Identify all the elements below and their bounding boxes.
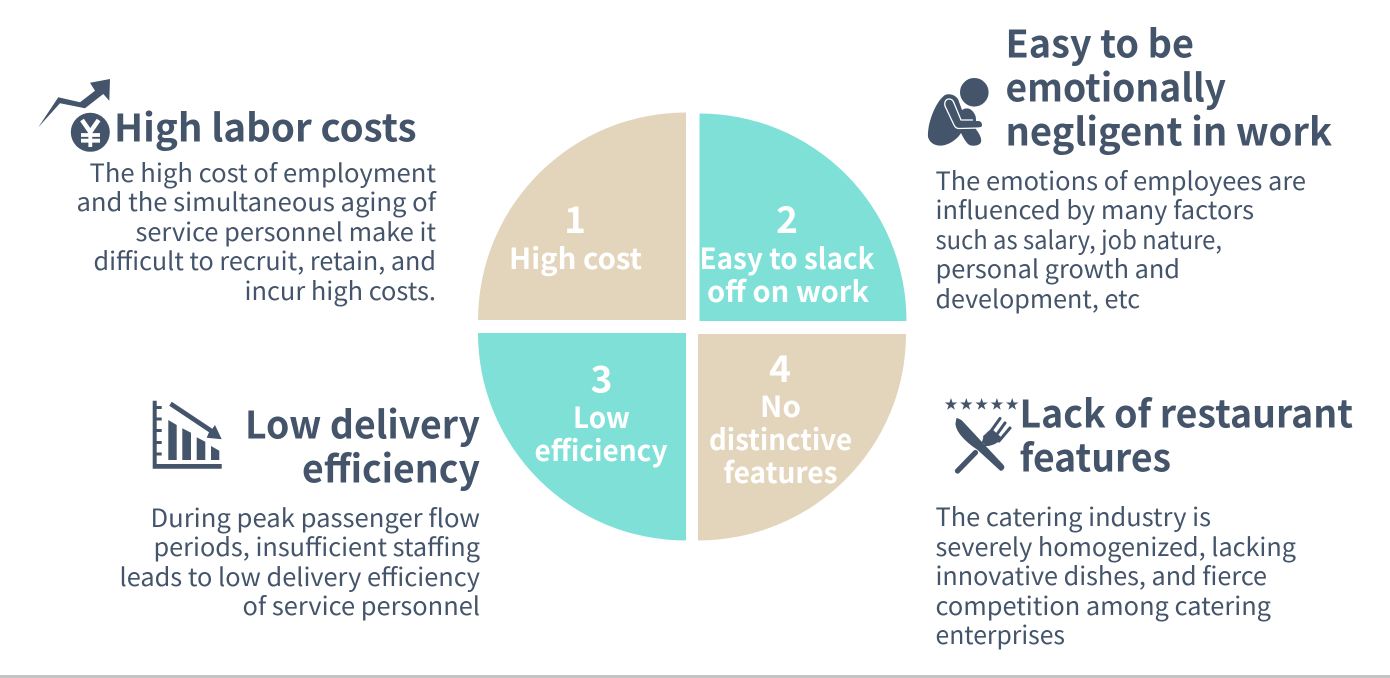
quadrant 3: Low efficiency <box>478 333 686 540</box>
heading: Easy to be emotionally negligent in work: negligent in work <box>1006 102 1332 156</box>
text block: emotions description <box>936 162 1306 316</box>
quadrant 1: High cost <box>478 112 686 320</box>
text block: emotions description: personal growth and <box>936 250 1180 286</box>
text block: emotions description: development, etc <box>936 280 1140 316</box>
heading: Low delivery efficiency <box>245 394 480 494</box>
text block: delivery description: of service personnel <box>242 587 480 623</box>
quadrant 3: Low efficiency: Low <box>573 395 630 437</box>
text block: high labor costs description: and the simultaneous aging of <box>76 183 437 219</box>
icon: declining bar chart <box>153 401 222 469</box>
text block: catering description <box>936 498 1296 652</box>
icon: five stars with crossed knife and fork <box>945 398 1018 471</box>
text block: high labor costs description: difficult to recruit, retain, and <box>94 242 436 278</box>
text block: high labor costs description <box>76 154 437 308</box>
quadrant 2: Easy to slack off on work: off on work <box>707 269 869 311</box>
text block: emotions description: such as salary, job nature, <box>936 221 1222 257</box>
heading: Lack of restaurant features: Lack of restaurant <box>1020 384 1353 438</box>
text block: catering description: severely homogenized, lacking <box>936 528 1296 564</box>
pie chart: four quadrants <box>478 112 906 540</box>
heading: Low delivery efficiency: efficiency <box>302 438 480 494</box>
quadrant 1: High cost: High cost <box>509 236 642 278</box>
heading: Easy to be emotionally negligent in work: emotionally <box>1006 58 1226 112</box>
text block: high labor costs description: service personnel make it <box>136 213 437 249</box>
heading: Low delivery efficiency: Low delivery <box>245 394 480 450</box>
panel: low delivery efficiency <box>120 394 480 623</box>
text block: emotions description: influenced by many factors <box>936 191 1254 227</box>
quadrant 4: No distinctive features <box>698 334 906 540</box>
icon: person hugging knees <box>928 78 989 146</box>
icon: rising arrow with yen coin <box>38 79 110 152</box>
quadrant 3: Low efficiency: 3 <box>591 350 612 404</box>
quadrant 4: No distinctive features: features <box>724 450 838 492</box>
text block: catering description: The catering industry is <box>936 498 1211 534</box>
quadrant 2: Easy to slack off on work: 2 <box>776 190 798 244</box>
text block: catering description: competition among catering <box>936 587 1271 623</box>
panel: emotionally negligent <box>928 14 1332 316</box>
quadrant 1: High cost: 1 <box>564 190 586 244</box>
panel: lack of restaurant features <box>936 384 1353 652</box>
quadrant 2: Easy to slack off on work: Easy to slack <box>700 236 875 278</box>
text block: emotions description: The emotions of employees are <box>936 162 1306 198</box>
heading: Lack of restaurant features <box>1020 384 1353 482</box>
panel: high labor costs <box>38 79 437 308</box>
heading: High labor costs: High labor costs <box>114 98 416 152</box>
text block: delivery description: leads to low delivery efficiency <box>120 558 480 594</box>
heading: Easy to be emotionally negligent in work <box>1006 14 1332 156</box>
text block: catering description: innovative dishes, and fierce <box>936 557 1267 593</box>
text block: delivery description <box>120 499 480 623</box>
text block: delivery description: periods, insufficient staffing <box>154 528 480 564</box>
quadrant 2: Easy to slack off on work <box>700 114 906 321</box>
text block: high labor costs description: incur high costs. <box>244 272 436 308</box>
quadrant 3: Low efficiency: efficiency <box>534 428 668 470</box>
heading: Lack of restaurant features: features <box>1020 428 1171 482</box>
quadrant 4: No distinctive features: distinctive <box>709 417 852 459</box>
quadrant 4: No distinctive features: No <box>760 384 801 426</box>
text block: delivery description: During peak passenger flow <box>150 499 480 535</box>
heading: Easy to be emotionally negligent in work: Easy to be <box>1006 14 1194 68</box>
quadrant 4: No distinctive features: 4 <box>769 339 791 393</box>
text block: catering description: enterprises <box>936 616 1065 652</box>
text block: high labor costs description: The high cost of employment <box>90 154 437 190</box>
